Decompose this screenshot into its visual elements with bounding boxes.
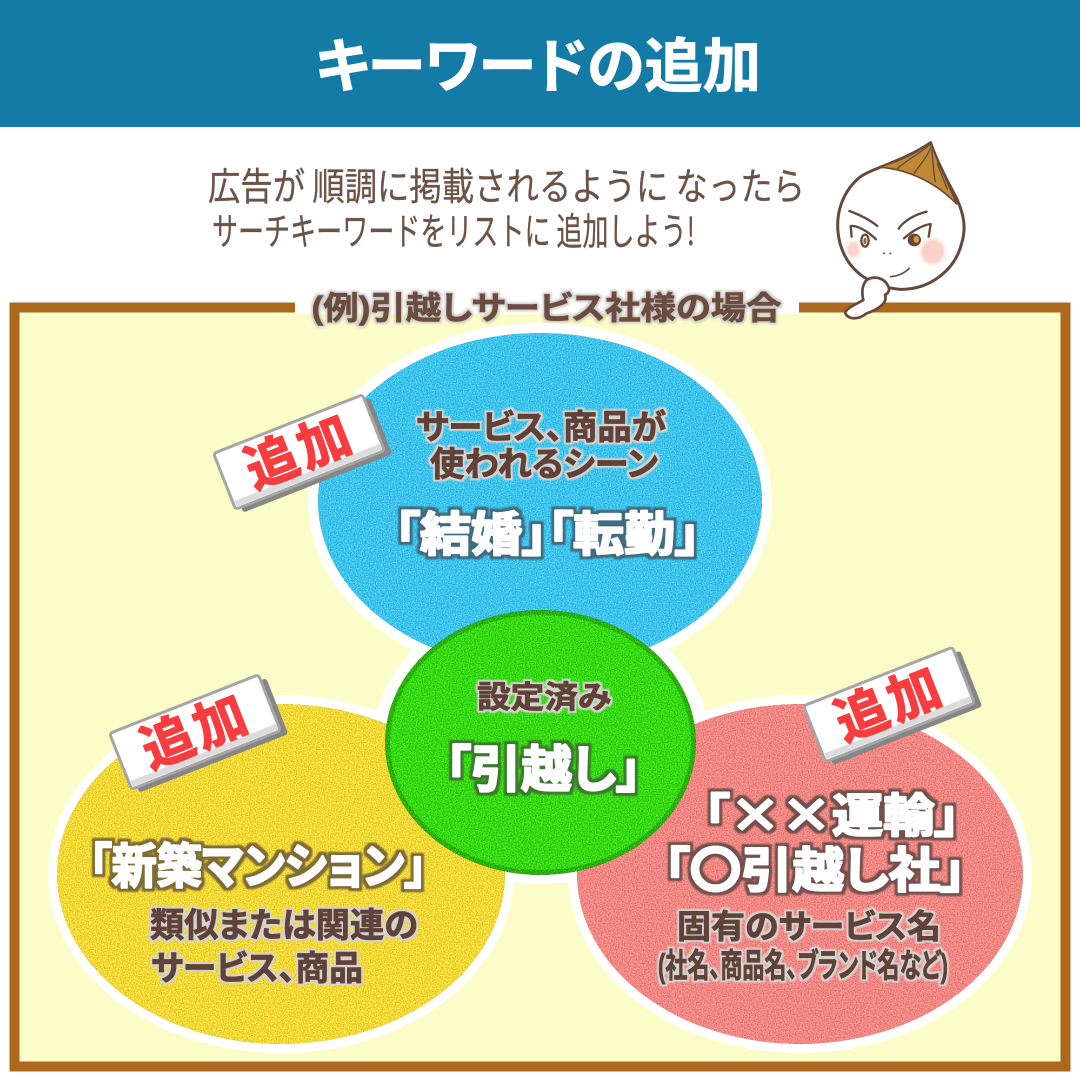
panel heading: (例)引越しサービス社様の場合	[312, 290, 782, 326]
blue circle caption: サービス、商品が	[416, 408, 666, 447]
tag: add, blue: 追加	[238, 407, 359, 500]
cheeks	[847, 239, 945, 264]
handwritten intro text	[208, 156, 805, 256]
hand	[845, 278, 889, 318]
tag: add, yellow	[110, 673, 288, 795]
handwritten intro text: 広告が 順調に掲載されるように なったら	[208, 156, 805, 211]
red circle caption: 固有のサービス名	[677, 908, 941, 945]
panel: example frame	[14, 308, 1066, 1066]
red circle caption	[658, 908, 948, 984]
yellow circle keywords: 「新築マンション」	[89, 827, 427, 897]
blue circle caption: 使われるシーン	[430, 446, 658, 484]
header banner	[0, 0, 1080, 127]
tag: add, blue	[214, 393, 392, 515]
yellow circle caption: サービス、商品	[151, 950, 363, 988]
chestnut cap	[879, 143, 957, 204]
yellow circle caption: 類似または関連の	[150, 907, 418, 945]
red circle keywords: 「〇引越し社」	[664, 831, 966, 901]
circle: yellow related	[57, 704, 505, 1044]
red circle caption: (社名、商品名、ブランド名など)	[658, 947, 948, 984]
red circle keywords	[664, 780, 966, 901]
circle: blue scenes	[318, 333, 762, 669]
tag: add, yellow: 追加	[134, 687, 255, 780]
blue circle caption	[416, 408, 666, 484]
eye pupils and nose	[863, 234, 921, 254]
face	[849, 211, 931, 277]
tag: add, red: 追加	[828, 659, 949, 753]
yellow circle caption	[150, 907, 418, 988]
circle outlines: white rings	[48, 323, 1032, 1053]
tag: add, red	[804, 645, 982, 767]
green circle caption: 設定済み	[477, 680, 611, 715]
title: キーワードの追加	[315, 34, 761, 100]
circle: red brand names	[577, 704, 1023, 1044]
circle: green already set	[388, 612, 694, 872]
blue circle keywords: 「結婚」「転勤」	[394, 496, 700, 565]
handwritten intro text: サーチキーワードをリストに 追加しよう!	[212, 201, 695, 256]
chestnut body	[838, 143, 964, 289]
icon: chestnut character	[838, 143, 964, 318]
red circle keywords: 「××運輸」	[704, 780, 960, 846]
green circle keyword: 「引越し」	[446, 730, 642, 802]
